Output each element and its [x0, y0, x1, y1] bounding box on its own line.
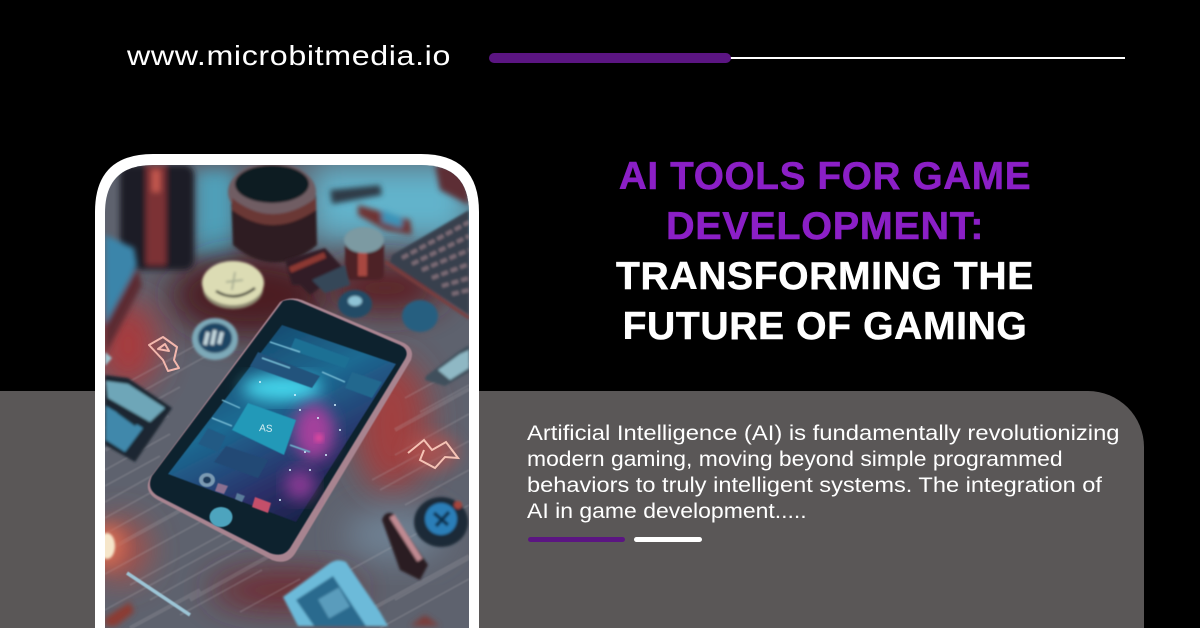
phone screen: [168, 325, 396, 522]
centre metal cup: [228, 163, 317, 262]
header rule: [489, 53, 1125, 63]
intro paragraph: Artificial Intelligence (AI) is fundamentally revolutionizing: [527, 420, 1120, 445]
neon icon right: [407, 434, 459, 470]
striped blue button: [192, 318, 238, 360]
round poker chip: [382, 497, 468, 580]
cream coin: [202, 261, 264, 309]
screen app icons: [199, 473, 271, 513]
wood grain: [105, 343, 469, 628]
title white line 3: TRANSFORMING THE: [616, 255, 1034, 298]
metal clip right: [425, 345, 469, 386]
title: [616, 155, 1034, 348]
purple accent bar: [528, 537, 625, 542]
left metallic gadget: [105, 352, 172, 462]
red clip gadget: [285, 248, 350, 295]
dark blue button: [338, 290, 372, 318]
bottom red objects: [105, 602, 440, 626]
title purple line 1: AI TOOLS FOR GAME: [619, 155, 1031, 198]
intro paragraph: [527, 420, 1120, 523]
small cylinder: [344, 227, 384, 280]
keyboard: [385, 210, 469, 318]
purple thick bar: [489, 53, 731, 63]
right round button: [402, 300, 438, 332]
title white line 4: FUTURE OF GAMING: [623, 305, 1027, 348]
photo: [89, 163, 470, 628]
grey lower panel: [0, 391, 1144, 628]
stylus: [127, 573, 190, 615]
glowing left lamp: [89, 524, 125, 568]
desk colour glows: [90, 165, 470, 610]
intro paragraph: behaviors to truly intelligent systems. The integration of: [527, 472, 1102, 497]
white accent bar: [634, 537, 702, 542]
left dark cylinder: [120, 165, 194, 270]
left blue book: [105, 235, 142, 355]
photo frame: phone on a desk: [95, 154, 479, 628]
top right gadgets: [330, 165, 469, 235]
central screen card: AS: [259, 423, 273, 435]
title purple line 2: DEVELOPMENT:: [666, 205, 984, 248]
nebula glow: [242, 375, 341, 501]
phone: [148, 298, 412, 562]
intro paragraph: modern gaming, moving beyond simple programmed: [527, 446, 1063, 471]
website url: www.microbitmedia.io: [127, 40, 451, 71]
screen widgets: [198, 338, 382, 478]
neon icon left: [149, 337, 179, 371]
phone body: [148, 298, 412, 562]
home button: [210, 507, 232, 527]
white thin line: [729, 57, 1125, 59]
blue handheld device: [283, 560, 388, 626]
wooden desk base: [105, 165, 469, 628]
central screen card: [232, 403, 296, 455]
intro paragraph: AI in game development.....: [527, 498, 807, 523]
white photo frame: [95, 154, 479, 628]
